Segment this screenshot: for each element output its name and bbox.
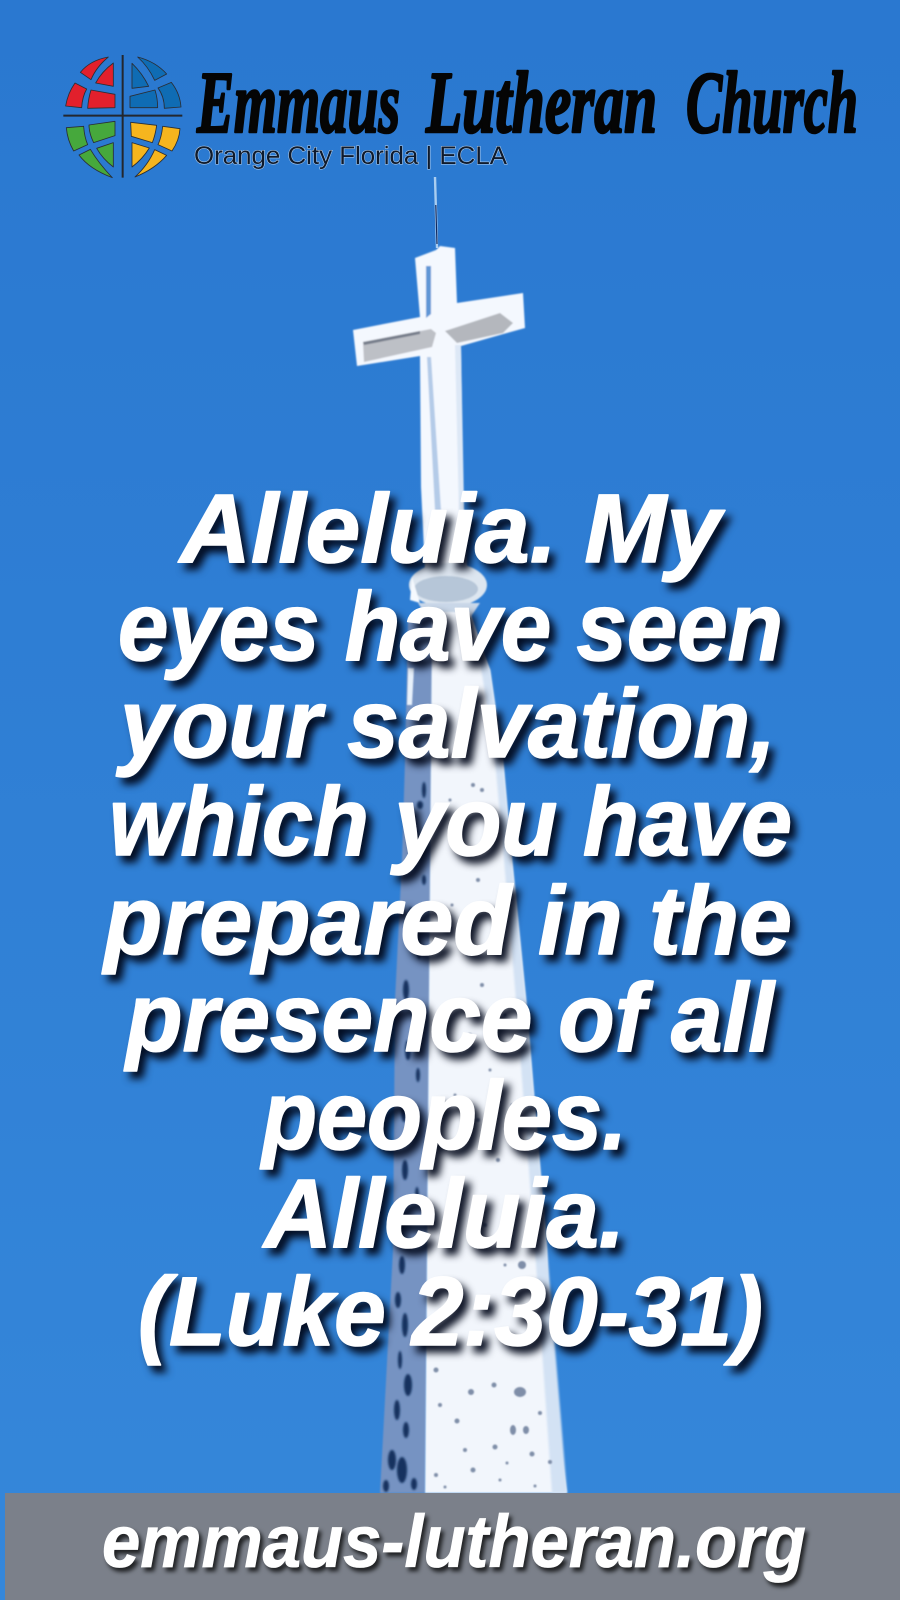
green quadrant	[66, 121, 115, 178]
footer bar	[5, 1493, 900, 1600]
logo: church globe emblem	[63, 55, 182, 178]
scripture verse text: which you have	[109, 767, 792, 876]
steeple ball knob	[409, 563, 487, 618]
speckles on lit side	[434, 783, 552, 1488]
church location subtitle: Orange City Florida | ECLA	[194, 142, 507, 170]
scripture verse text: (Luke 2:30-31)	[138, 1257, 763, 1366]
antenna on cross	[435, 177, 437, 248]
dark weather stains on shaded side	[383, 782, 426, 1492]
white cross	[353, 246, 525, 570]
website address: emmaus-lutheran.org	[102, 1500, 806, 1583]
scripture verse text: eyes have seen	[118, 572, 783, 681]
steeple shaded side	[380, 612, 433, 1493]
church name: Lutheran	[425, 55, 657, 152]
blue quadrant	[130, 57, 181, 108]
scripture verse text	[101, 474, 792, 1366]
church name: Emmaus	[196, 55, 400, 152]
scripture verse text: Alleluia. My	[178, 474, 725, 583]
emblem cross lines	[63, 55, 182, 178]
church name	[196, 55, 858, 152]
red quadrant	[66, 57, 115, 108]
steeple left edge highlight	[407, 668, 414, 705]
scripture verse text: prepared in the	[101, 866, 792, 975]
steeple photograph illustration	[353, 177, 567, 1493]
steeple lit side	[425, 612, 567, 1493]
scripture verse text: Alleluia.	[262, 1159, 625, 1268]
scripture verse text: presence of all	[123, 963, 776, 1072]
steeple right edge shading	[476, 640, 567, 1493]
scripture verse text: peoples.	[259, 1061, 627, 1170]
scripture verse text: your salvation,	[115, 669, 776, 778]
yellow quadrant	[131, 122, 180, 177]
